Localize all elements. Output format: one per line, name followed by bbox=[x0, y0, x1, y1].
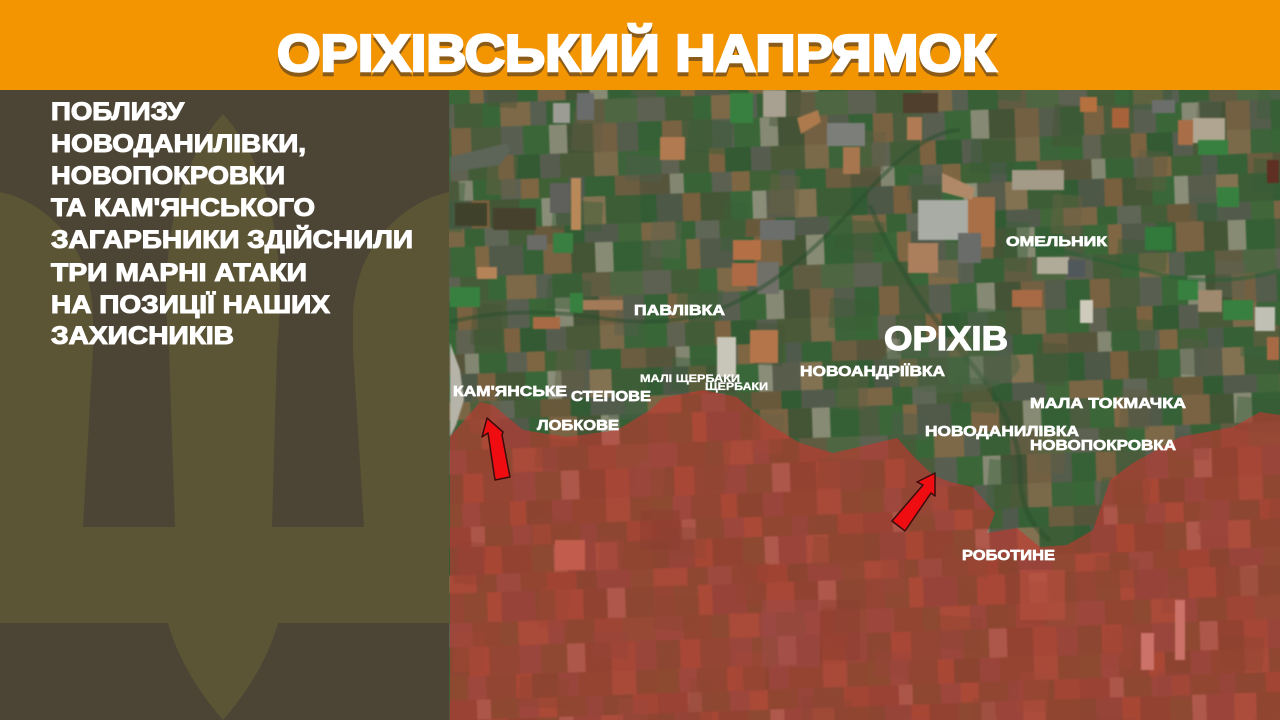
occupied territory overlay bbox=[450, 390, 1280, 720]
header bar bbox=[0, 0, 1280, 90]
label: Павлівка: ПАВЛІВКА bbox=[634, 302, 725, 319]
label: Омельник: ОМЕЛЬНИК bbox=[1006, 233, 1108, 249]
text block: attack summary: НОВОДАНИЛІВКИ, bbox=[51, 130, 306, 158]
title: ОРІХІВСЬКИЙ НАПРЯМОК bbox=[277, 24, 996, 83]
arrow: Kamianske attack bbox=[482, 418, 510, 480]
label: Новоданилівка: НОВОДАНИЛІВКА bbox=[925, 423, 1079, 440]
text block: attack summary bbox=[51, 98, 413, 350]
icon: trident watermark bbox=[0, 114, 449, 720]
text block: attack summary: ЗАХИСНИКІВ bbox=[51, 322, 234, 350]
map: blurred field mosaic bbox=[440, 80, 1280, 720]
label: Степове: СТЕПОВЕ bbox=[571, 388, 651, 405]
label: Новопокровка: НОВОПОКРОВКА bbox=[1030, 437, 1176, 454]
label: Оріхів: ОРІХІВ bbox=[884, 320, 1008, 358]
text block: attack summary: ТА КАМ'ЯНСЬКОГО bbox=[51, 194, 315, 222]
label: Лобкове: ЛОБКОВЕ bbox=[537, 417, 619, 434]
label: Мала Токмачка: МАЛА ТОКМАЧКА bbox=[1030, 395, 1186, 412]
panel: left text panel bbox=[0, 90, 449, 720]
arrow: Novodanylivka attack bbox=[892, 473, 935, 531]
label: Новоандріївка: НОВОАНДРІЇВКА bbox=[800, 363, 945, 380]
label: Роботине: РОБОТИНЕ bbox=[962, 547, 1055, 564]
label: Щербаки: ЩЕРБАКИ bbox=[705, 381, 768, 393]
label: Малі Щербаки: МАЛІ ЩЕРБАКИ bbox=[640, 373, 740, 385]
text block: attack summary: НА ПОЗИЦІЇ НАШИХ bbox=[51, 291, 330, 319]
text block: attack summary: ЗАГАРБНИКИ ЗДІЙСНИЛИ bbox=[51, 224, 413, 254]
text block: attack summary: ПОБЛИЗУ bbox=[51, 98, 184, 126]
text block: attack summary: НОВОПОКРОВКИ bbox=[51, 162, 285, 190]
satellite map bbox=[440, 80, 1280, 720]
text block: attack summary: ТРИ МАРНІ АТАКИ bbox=[51, 259, 307, 287]
label: Кам'янське: КАМ'ЯНСЬКЕ bbox=[453, 383, 567, 400]
